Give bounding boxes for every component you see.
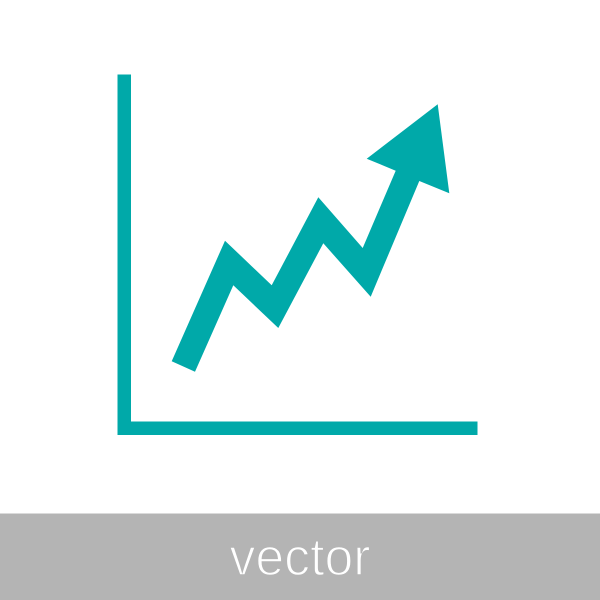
band background: [0, 514, 600, 600]
bottom caption band: [0, 514, 600, 600]
caption: vector: vector: [230, 528, 370, 587]
rising zigzag arrow: [172, 104, 449, 372]
chart icon: [118, 74, 478, 435]
chart axes: [118, 74, 478, 435]
